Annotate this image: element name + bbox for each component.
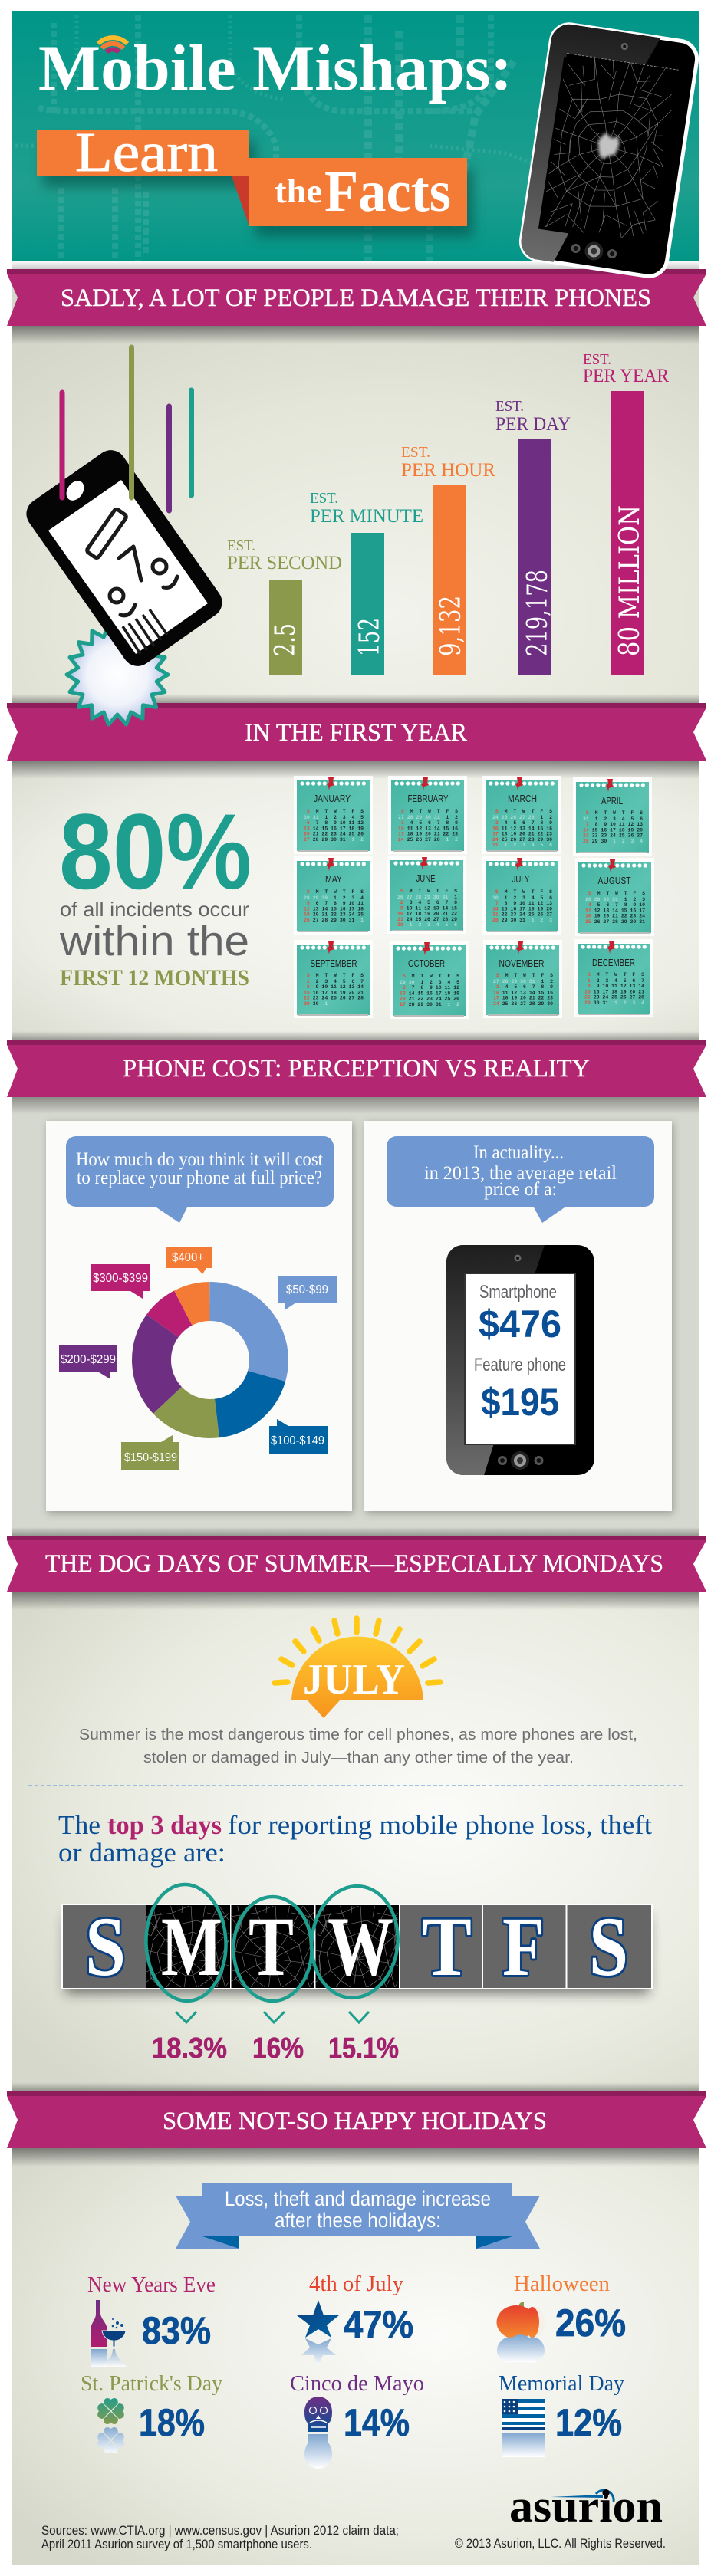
calendar: June: 16 17 18 19 20 21 22 xyxy=(397,912,457,917)
calendar: November: NOVEMBER xyxy=(499,958,545,969)
icon: price phone: Smartphone xyxy=(479,1282,557,1303)
calendar: July: 21 22 23 24 25 26 27 xyxy=(492,912,552,918)
bar: per second: EST. xyxy=(227,537,255,554)
calendar: November xyxy=(483,940,562,1018)
calendar: February: 27 28 29 30 31 1 2 xyxy=(398,815,458,820)
weekday tiles: W xyxy=(328,1900,393,1993)
icon: pumpkin xyxy=(497,2302,545,2363)
holiday: Cinco de Mayo: 14% xyxy=(344,2401,410,2444)
calendar: February: 3 4 5 6 7 8 9 xyxy=(398,820,458,826)
holiday: New Years Eve: New Years Eve xyxy=(87,2272,216,2297)
calendar: June: 2 3 4 5 6 7 8 xyxy=(397,900,457,905)
calendar: January xyxy=(294,776,373,854)
calendar: May: 12 13 14 15 16 17 18 xyxy=(304,906,364,912)
calendar: July: 7 8 9 10 11 12 13 xyxy=(492,901,552,906)
calendar: June: 26 27 28 29 30 31 1 xyxy=(397,895,457,900)
calendar: April xyxy=(573,777,652,856)
calendar: August: AUGUST xyxy=(598,875,631,886)
holiday: New Years Eve xyxy=(87,2272,216,2367)
holiday: Cinco de Mayo xyxy=(290,2371,424,2469)
text block: 80 percent: within the xyxy=(59,917,249,964)
callout: ribbon xyxy=(176,2183,540,2249)
calendar: August: 18 19 20 21 22 23 24 xyxy=(585,914,645,919)
heading: banner three: PHONE COST: PERCEPTION VS REALITY xyxy=(123,1055,590,1083)
calendar: May: 5 6 7 8 9 10 11 xyxy=(304,901,364,906)
calendar: July: 14 15 16 17 18 19 20 xyxy=(492,906,552,912)
logo: asurion: asurion xyxy=(509,2481,663,2532)
callout: actual price intro: in 2013, the average retail xyxy=(424,1163,617,1184)
heading: top 3 days: or damage are: xyxy=(58,1838,225,1868)
icon: price phone: $195 xyxy=(481,1381,559,1424)
heading: banner five: SOME NOT-SO HAPPY HOLIDAYS xyxy=(163,2108,547,2135)
bar: per minute: PER MINUTE xyxy=(310,506,423,527)
heading: banner three xyxy=(7,1040,706,1097)
heading: banner one xyxy=(7,269,706,326)
icon: falling phone xyxy=(21,444,228,672)
calendar: March: 10 11 12 13 14 15 16 xyxy=(492,826,552,831)
holiday: St. Patrick's Day xyxy=(81,2371,222,2453)
callout: actual price intro xyxy=(387,1136,654,1223)
heading: banner five xyxy=(7,2091,706,2148)
calendar: October: 29 30 1 2 3 4 5 xyxy=(400,980,459,985)
panel: hero xyxy=(12,12,699,261)
calendar: June: JUNE xyxy=(416,872,436,884)
text block: 80 percent xyxy=(59,791,252,991)
calendar: August: 28 29 30 31 1 2 3 xyxy=(585,897,645,902)
calendar: September: 22 23 24 25 26 27 28 xyxy=(304,996,364,1001)
label: $400+: $400+ xyxy=(172,1251,204,1264)
calendar: October: 13 14 15 16 17 18 19 xyxy=(400,991,459,996)
calendar: June: 9 10 11 12 13 14 15 xyxy=(397,905,457,911)
bar: per hour xyxy=(401,444,495,675)
text block: summer description xyxy=(79,1727,637,1766)
holiday: Memorial Day: Memorial Day xyxy=(499,2371,624,2396)
calendar: August: 25 26 27 28 29 30 31 xyxy=(585,919,645,925)
label: $200-$299: $200-$299 xyxy=(61,1353,116,1366)
weekday tiles: F xyxy=(502,1900,545,1993)
calendar: June: 23 24 25 26 27 28 29 xyxy=(397,917,457,922)
calendar: October: 20 21 22 23 24 25 26 xyxy=(400,997,459,1002)
calendar: September xyxy=(294,940,373,1018)
weekday tiles: T xyxy=(249,1900,294,1993)
calendar: November: 17 18 19 20 21 22 23 xyxy=(493,996,553,1001)
icon: flag xyxy=(502,2399,545,2457)
heading: top 3 days: top 3 days xyxy=(107,1810,222,1840)
label: $100-$149 xyxy=(269,1419,328,1454)
calendar: December: 1 2 3 4 5 6 7 xyxy=(584,978,644,984)
holiday: New Years Eve: 83% xyxy=(142,2309,211,2352)
panel: phone cost section background xyxy=(12,1097,699,1536)
bar: per second xyxy=(227,537,342,675)
bar: per hour: EST. xyxy=(401,444,430,461)
calendar: March: 24 25 26 27 28 29 30 xyxy=(492,837,552,843)
calendar: October: 6 7 8 9 10 11 12 xyxy=(400,985,459,991)
heading: banner two: IN THE FIRST YEAR xyxy=(245,719,467,747)
holiday: Halloween: Halloween xyxy=(514,2272,610,2296)
calendar: March: MARCH xyxy=(508,793,537,804)
panel: reality card xyxy=(364,1121,673,1513)
bar: per second: 2.5 xyxy=(270,623,301,656)
label: $300-$399: $300-$399 xyxy=(93,1272,148,1285)
panel: first year section background xyxy=(12,761,699,1040)
label: $150-$199 xyxy=(121,1435,179,1470)
bar: per minute: EST. xyxy=(310,490,338,507)
icon: cracked tablet xyxy=(518,22,699,278)
day percentages: 15.1% xyxy=(328,2032,399,2065)
calendar: November: 3 4 5 6 7 8 9 xyxy=(493,984,553,990)
icon: July sun xyxy=(275,1618,440,1718)
calendar: May: 26 27 28 29 30 31 1 xyxy=(304,918,364,923)
day percentages xyxy=(152,2032,399,2065)
calendar: January: 20 21 22 23 24 25 26 xyxy=(304,832,364,837)
holiday: 4th of July: 47% xyxy=(344,2303,413,2346)
bar: per second: PER SECOND xyxy=(227,553,342,573)
icon: price phone: $476 xyxy=(479,1303,561,1346)
label: $200-$299 xyxy=(59,1345,117,1379)
calendar: April: 21 22 23 24 25 26 27 xyxy=(583,833,643,839)
calendar: July: JULY xyxy=(512,873,530,885)
holiday: 4th of July xyxy=(297,2272,413,2367)
calendar: October: OCTOBER xyxy=(408,958,445,969)
calendar: January: 30 31 1 2 3 4 5 xyxy=(304,815,364,820)
text block: sources: April 2011 Asurion survey of 1,500 smartphone users. xyxy=(41,2537,312,2551)
panel: damage bar chart section background xyxy=(12,261,699,703)
title: Mobile Mishaps: xyxy=(38,32,512,104)
calendar: March xyxy=(482,776,561,854)
calendar: January: JANUARY xyxy=(314,793,351,804)
label: $400+ xyxy=(166,1247,212,1274)
calendar: July xyxy=(482,856,561,935)
text block: summer description: Summer is the most dangerous time for cell phones, as more phones are lost, xyxy=(79,1727,637,1743)
panel: holidays section background xyxy=(12,2148,699,2565)
calendar: March: 3 4 5 6 7 8 9 xyxy=(492,820,552,826)
calendar: December xyxy=(574,939,653,1017)
icon: star xyxy=(297,2300,339,2367)
icon: impact starburst xyxy=(67,625,168,724)
icon: price phone xyxy=(446,1245,594,1475)
calendar: August: 11 12 13 14 15 16 17 xyxy=(585,908,645,913)
calendar: August xyxy=(575,858,654,936)
heading: banner four: THE DOG DAYS OF SUMMER—ESPECIALLY MONDAYS xyxy=(45,1550,663,1578)
calendar: June xyxy=(387,856,466,934)
callout: actual price intro: In actuality... xyxy=(473,1142,564,1163)
weekday tiles: T xyxy=(422,1900,472,1993)
heading: top 3 days xyxy=(58,1810,652,1868)
callout: learn the facts: Learn xyxy=(75,121,218,183)
callout: perception question: to replace your phone at full price? xyxy=(77,1168,322,1188)
calendar: April: 31 1 2 3 4 5 6 xyxy=(583,816,643,822)
calendar: September: 8 9 10 11 12 13 14 xyxy=(304,984,364,990)
calendar: November: 10 11 12 13 14 15 16 xyxy=(493,990,553,995)
calendar: October: 27 28 29 30 31 1 2 xyxy=(400,1002,459,1007)
day percentages: 16% xyxy=(252,2032,304,2065)
calendar: March: 31 1 2 3 4 5 6 xyxy=(492,843,552,848)
calendar: May: 19 20 21 22 23 24 25 xyxy=(304,912,364,918)
holiday: Memorial Day xyxy=(499,2371,624,2457)
calendar: September: SEPTEMBER xyxy=(310,958,357,969)
calendar: April: 7 8 9 10 11 12 13 xyxy=(583,822,643,827)
holiday: Halloween: 26% xyxy=(555,2302,626,2344)
calendar: November: 27 28 29 30 31 1 2 xyxy=(493,979,553,984)
top day circles xyxy=(144,1882,403,2003)
calendar: November: 24 25 26 27 28 29 30 xyxy=(493,1001,553,1007)
holiday: Memorial Day: 12% xyxy=(555,2401,622,2444)
panel: perception card xyxy=(46,1121,354,1513)
motion lines xyxy=(62,347,192,511)
icon: price phone: Feature phone xyxy=(474,1355,566,1375)
callout: learn the facts: Facts xyxy=(324,159,451,224)
calendar: February: 10 11 12 13 14 15 16 xyxy=(398,826,458,831)
arrows: day markers xyxy=(176,2012,369,2022)
calendar: December: 8 9 10 11 12 13 14 xyxy=(584,984,644,989)
bar: per day: EST. xyxy=(495,398,524,415)
heading: banner two xyxy=(7,703,706,761)
text block: sources: Sources: www.CTIA.org | www.census.gov | Asurion 2012 claim data; xyxy=(41,2523,399,2538)
icon: champagne xyxy=(91,2300,127,2367)
bar: per year: EST. xyxy=(583,351,611,368)
calendar: December: 29 30 31 1 2 3 4 xyxy=(584,1001,644,1006)
calendar: March: 17 18 19 20 21 22 23 xyxy=(492,832,552,837)
calendar: March: 24 25 26 27 28 1 2 xyxy=(492,815,552,820)
heading: banner four xyxy=(7,1536,706,1592)
calendar: January: 27 28 29 30 31 1 2 xyxy=(304,837,364,843)
text block: 80 percent: of all incidents occur xyxy=(60,898,249,921)
calendar: May: 28 29 30 1 2 3 4 xyxy=(304,895,364,901)
weekday tiles xyxy=(57,1904,658,2003)
bar: per minute xyxy=(310,490,423,675)
calendar: December: 22 23 24 25 26 27 28 xyxy=(584,995,644,1001)
calendar: April: 28 29 30 1 2 3 4 xyxy=(583,839,643,844)
calendar: September: 29 30 1 xyxy=(304,1001,328,1007)
icon: clover xyxy=(97,2398,124,2453)
callout: ribbon: after these holidays: xyxy=(275,2209,441,2232)
icon: July sun: JULY xyxy=(303,1656,405,1704)
callout: learn the facts: the xyxy=(275,172,322,210)
calendar: February: 24 25 26 27 28 1 2 xyxy=(398,837,458,843)
icon: wifi signal xyxy=(98,38,127,52)
holiday: St. Patrick's Day: 18% xyxy=(139,2401,205,2444)
icon: sugar skull xyxy=(304,2397,332,2469)
text block: copyright: © 2013 Asurion, LLC. All Rights Reserved. xyxy=(455,2536,666,2551)
calendar: May xyxy=(294,856,373,935)
bar: per year: 80 MILLION xyxy=(614,505,646,656)
label: $300-$399 xyxy=(91,1264,150,1299)
holiday: St. Patrick's Day: St. Patrick's Day xyxy=(81,2371,222,2396)
callout: learn the facts xyxy=(37,121,473,237)
calendar: April: 14 15 16 17 18 19 20 xyxy=(583,827,643,833)
calendar: December: 15 16 17 18 19 20 21 xyxy=(584,989,644,994)
calendar: February: 17 18 19 20 21 22 23 xyxy=(398,832,458,837)
weekday tiles: M xyxy=(161,1900,222,1993)
calendar: December: DECEMBER xyxy=(592,957,635,968)
bar: per minute: 152 xyxy=(354,618,386,656)
label: $50-$99 xyxy=(278,1276,337,1310)
callout: actual price intro: price of a: xyxy=(484,1179,557,1200)
text block: summer description: stolen or damaged in July—than any other time of the year. xyxy=(143,1750,574,1766)
heading: top 3 days: The xyxy=(58,1810,100,1840)
bar: per day: PER DAY xyxy=(495,414,571,435)
bar: per year: PER YEAR xyxy=(583,366,669,386)
calendar: February xyxy=(388,776,467,854)
calendar: July: 28 29 30 31 1 2 3 xyxy=(492,918,552,923)
heading: banner one: SADLY, A LOT OF PEOPLE DAMAGE THEIR PHONES xyxy=(61,284,651,312)
callout: perception question: How much do you think it will cost xyxy=(76,1149,323,1170)
bar: per hour: 9,132 xyxy=(436,596,467,656)
holiday: Cinco de Mayo: Cinco de Mayo xyxy=(290,2371,424,2396)
calendar: June: 30 1 2 3 4 5 6 xyxy=(397,922,457,928)
calendar: September: 1 2 3 4 5 6 7 xyxy=(304,979,364,984)
calendar: August: 4 5 6 7 8 9 10 xyxy=(585,902,645,908)
holiday: Halloween xyxy=(497,2272,626,2363)
heading: top 3 days: for reporting mobile phone loss, theft xyxy=(228,1810,652,1840)
callout: ribbon: Loss, theft and damage increase xyxy=(225,2187,491,2210)
day percentages: 18.3% xyxy=(152,2032,227,2065)
calendars xyxy=(294,776,654,1019)
calendar: July: 30 1 2 3 4 5 6 xyxy=(492,895,552,901)
weekday tiles: S xyxy=(85,1900,126,1993)
calendar: January: 13 14 15 16 17 18 19 xyxy=(304,826,364,831)
holiday: 4th of July: 4th of July xyxy=(309,2272,403,2296)
bar: per day xyxy=(495,398,571,675)
label: $150-$199: $150-$199 xyxy=(124,1451,177,1464)
callout: perception question xyxy=(66,1136,334,1223)
calendar: September: 15 16 17 18 19 20 21 xyxy=(304,990,364,995)
text block: 80 percent: 80% xyxy=(59,791,252,912)
calendar: October xyxy=(390,941,469,1019)
panel: summer section background xyxy=(12,1592,699,2091)
label: $50-$99: $50-$99 xyxy=(286,1283,328,1296)
calendar: February: FEBRUARY xyxy=(408,793,449,804)
calendar: May: MAY xyxy=(325,873,342,885)
weekday tiles: S xyxy=(589,1900,628,1993)
bar: per day: 219,178 xyxy=(522,570,554,656)
text block: sources xyxy=(41,2523,399,2551)
label: $100-$149: $100-$149 xyxy=(271,1434,324,1447)
bar: per year xyxy=(583,351,669,675)
chart: donut xyxy=(152,1302,268,1418)
bar: per hour: PER HOUR xyxy=(401,460,495,481)
calendar: April: APRIL xyxy=(601,795,623,807)
calendar: January: 6 7 8 9 10 11 12 xyxy=(304,820,364,826)
text block: 80 percent: FIRST 12 MONTHS xyxy=(60,965,249,991)
bar chart xyxy=(227,351,669,675)
